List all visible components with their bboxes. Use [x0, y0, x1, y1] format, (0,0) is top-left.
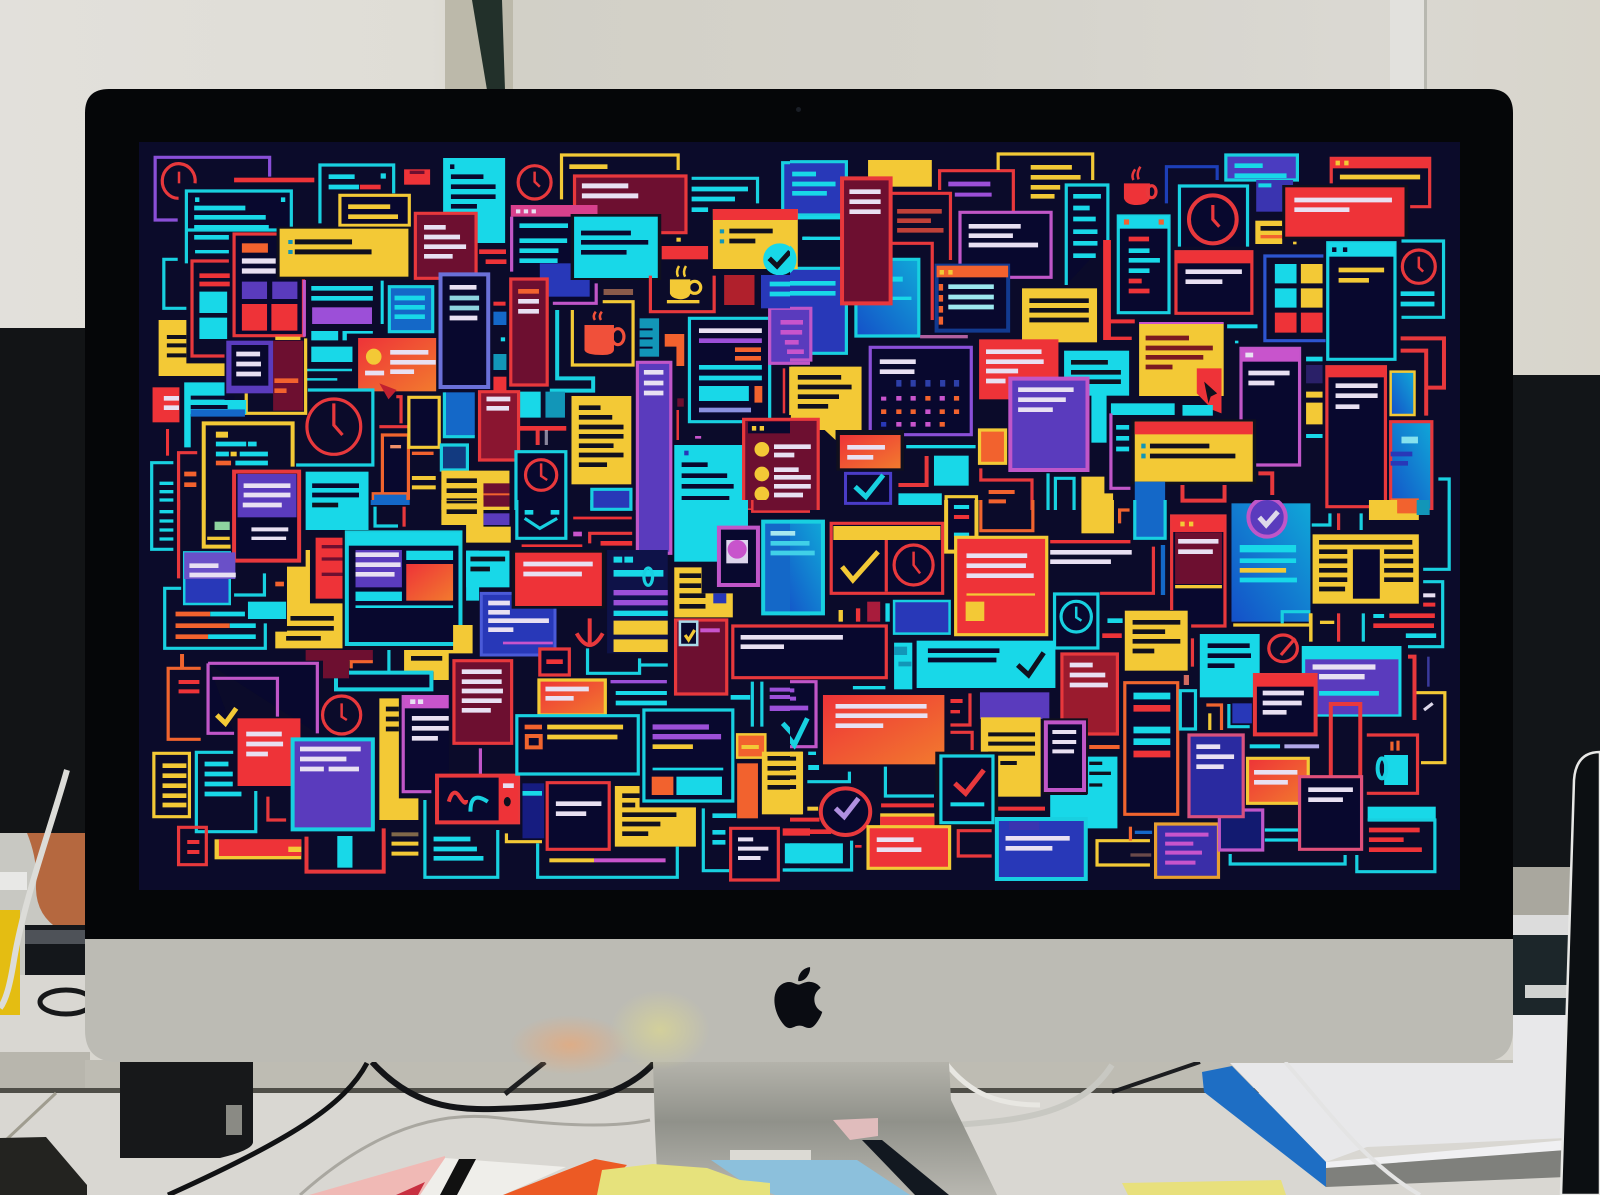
sticky notes on the desk: [309, 1118, 1286, 1195]
cyan tick: [1227, 324, 1258, 343]
pink title window: [511, 205, 598, 303]
cyan card: [571, 214, 661, 280]
cyan red list: [1357, 807, 1436, 872]
cyan text card: [1064, 351, 1129, 443]
cyan bracket: [164, 259, 186, 308]
yellow frame bottom: [204, 500, 231, 547]
red striped tile: [316, 538, 342, 599]
tiny ticks: [1102, 618, 1428, 720]
left desk items: [0, 770, 92, 1088]
check card red: [935, 752, 998, 830]
red small note: [731, 828, 778, 880]
yellow list frame: [154, 753, 189, 817]
blue mini card: [389, 287, 433, 332]
maroon panel with yellow frame: [246, 337, 306, 413]
yellow phone: [946, 497, 976, 540]
red report card: [956, 537, 1047, 635]
blue block: [444, 392, 475, 437]
background: office wall: [0, 0, 1600, 400]
dark device right edge: [1561, 752, 1600, 1195]
yellow note: [1022, 288, 1097, 342]
cyan frame with bars: [320, 165, 394, 223]
purple and yellow stack: [980, 692, 1049, 797]
cyan U: [588, 648, 668, 673]
red phone frame left: [168, 654, 201, 739]
purple list edge: [781, 682, 816, 747]
small stack: [392, 832, 418, 856]
cyan check list: [731, 682, 809, 735]
progress frame: [165, 588, 265, 648]
note with red cursor: [1139, 322, 1224, 416]
cyan and red cluster: [898, 445, 976, 486]
small red window: [1255, 675, 1316, 734]
black box on the desk: [120, 1062, 253, 1158]
teal frame: [1180, 691, 1195, 729]
magenta phone: [719, 528, 758, 585]
small blocks: [493, 302, 506, 370]
blue text window: [481, 593, 555, 655]
yellow note: [1125, 611, 1188, 671]
clock frame right: [1401, 241, 1444, 317]
red frame lower: [981, 468, 1032, 510]
mixed connector bits: [1206, 703, 1319, 748]
cyan list frame right: [1320, 582, 1443, 647]
screen background: [139, 142, 1460, 890]
magenta layered frame with check: [208, 663, 317, 733]
magenta text card: [960, 212, 1051, 277]
yellow and cyan rails: [1233, 612, 1313, 642]
yellow phone: [946, 493, 976, 552]
blue card lower: [786, 268, 846, 353]
purple column bottom: [637, 493, 671, 553]
blue card and dark red tile: [724, 237, 815, 308]
yellow speech note: [791, 367, 862, 440]
red frame list: [892, 193, 950, 320]
cyan pill and lines: [234, 573, 286, 619]
maroon tall card: [842, 178, 891, 303]
maroon left strip: [781, 419, 818, 516]
cyan list far left: [152, 463, 173, 530]
blue text window: [997, 819, 1086, 879]
yellow doc tile: [674, 567, 733, 617]
red bars: [479, 249, 506, 264]
cyan bent frame: [550, 310, 593, 391]
yellow slab: [1081, 477, 1113, 510]
small navy window: [441, 445, 467, 470]
red U with cyan tile: [307, 828, 384, 872]
cyan card lower: [306, 472, 369, 538]
red U: [1182, 473, 1272, 501]
blue square: [894, 601, 950, 634]
small red box: [540, 649, 569, 675]
large cyan frame: [186, 191, 291, 263]
small red struts: [853, 686, 972, 750]
red T struts: [519, 426, 566, 445]
red navy card: [547, 783, 609, 849]
yellow newspaper: [1313, 534, 1419, 604]
magenta mini doc: [1042, 718, 1088, 794]
clock status window: [516, 452, 566, 518]
red small frame: [179, 827, 206, 865]
navy red banner: [781, 626, 886, 678]
icon: red clock: [518, 166, 551, 199]
cyan bottom-left bar: [790, 841, 862, 870]
navy red card: [733, 626, 815, 678]
mixed side strip: [1306, 357, 1323, 438]
blue card: [763, 522, 817, 613]
cyan stack centre: [306, 281, 384, 379]
big red banner: [1282, 185, 1408, 239]
blue card edge: [592, 497, 631, 509]
book pages: [1326, 1140, 1566, 1187]
cyan window list: [1118, 216, 1169, 313]
tall red outline: [1331, 704, 1360, 777]
red note: [238, 718, 300, 786]
maroon list window: [744, 419, 813, 510]
red bracket: [958, 831, 992, 856]
cyan document right: [674, 445, 748, 542]
red tag: [662, 238, 708, 259]
yellow doc right: [784, 367, 815, 415]
icon: clock: [323, 696, 361, 734]
right dark panel: [1510, 375, 1600, 867]
upper right fragments: [1312, 497, 1449, 569]
cyan list edge: [152, 500, 179, 578]
pink strip: [920, 335, 968, 338]
cyan document card: [443, 158, 505, 243]
purple frame with clock: [155, 157, 270, 220]
magenta window: [403, 695, 449, 792]
purple text card: [1010, 379, 1088, 470]
blue card with check badge: [1231, 498, 1310, 622]
red lines: [522, 517, 632, 547]
cyan check banner: [917, 641, 1055, 688]
blue binder: [1202, 1066, 1326, 1187]
navy status column: [1125, 683, 1178, 814]
yellow step block: [441, 500, 511, 543]
red frame left: [192, 261, 230, 356]
orange bar: [1089, 745, 1120, 749]
yellow frame: [562, 155, 678, 199]
yellow L block: [404, 625, 473, 680]
calendar: [870, 347, 971, 435]
blue and red rails: [371, 500, 410, 527]
blue card edge: [781, 522, 823, 613]
yellow phone frame: [409, 397, 439, 489]
monitor chin: [85, 939, 1513, 1075]
small purple-framed note: [226, 341, 273, 393]
purple magenta card: [770, 308, 813, 363]
maroon card with red tab: [480, 377, 519, 460]
icon: apple logo: [774, 967, 822, 1028]
yellow stacked block: [441, 471, 509, 512]
red card: [512, 550, 605, 609]
clock window bottom: [517, 493, 566, 538]
red and yellow stripes: [790, 803, 1045, 834]
yellow window with check badge: [713, 209, 797, 275]
app grid panel: [1265, 256, 1326, 341]
cyan frame right: [692, 178, 758, 212]
cyan tall list: [1066, 185, 1108, 285]
icon: red down arrow: [577, 618, 603, 647]
maroon bottom edge: [752, 497, 813, 512]
yellow coded frame: [204, 423, 293, 510]
clock panel: [296, 390, 373, 465]
cyan side card: [466, 551, 509, 601]
screen collage: top-right quadrant: [790, 152, 1451, 510]
screen collage: bottom-left quadrant: [150, 500, 810, 882]
icon: red coffee mug: [572, 302, 633, 365]
orange tile: [1248, 758, 1308, 803]
cyan bits: [1265, 828, 1300, 842]
cables: [168, 1062, 1200, 1195]
desk surface: [0, 1060, 1600, 1195]
monitor stand: [653, 1062, 997, 1195]
yellow frame bottom: [1097, 827, 1152, 865]
yellow window edge: [770, 209, 798, 275]
dark blue column: [506, 783, 544, 842]
orange bracket: [665, 334, 684, 366]
small orange tile: [737, 734, 765, 758]
red struts and phone: [373, 397, 408, 502]
red message card: [358, 338, 436, 399]
red list frame: [179, 453, 197, 563]
blue bracket: [1166, 167, 1217, 203]
orange column: [737, 763, 758, 818]
right desk items behind monitor: [1510, 867, 1580, 1015]
cyan card bottom: [306, 497, 369, 530]
red stick: [166, 429, 169, 456]
main dashboard window: [343, 530, 464, 647]
cyan note: [1200, 634, 1260, 697]
blue card edge: [783, 163, 826, 216]
yellow doc: [615, 786, 696, 847]
red window: [1331, 158, 1430, 207]
cyan purple panel: [1302, 646, 1401, 717]
cyan notch card: [1050, 757, 1117, 828]
left blue window: [184, 552, 236, 604]
yellow red bar: [215, 839, 301, 859]
cyan tray: [1230, 854, 1345, 864]
yellow header block: [868, 160, 932, 187]
red list card: [979, 339, 1058, 399]
teal stripes: [894, 643, 912, 689]
purple doc edge: [786, 308, 811, 360]
yellow note left: [159, 320, 225, 376]
clock panel: [1179, 186, 1248, 247]
cyan list small: [703, 808, 736, 871]
maroon doc: [454, 661, 512, 775]
red window: [1176, 252, 1252, 313]
icon: yellow coffee cup: [650, 266, 714, 312]
orange note: [836, 430, 904, 471]
screen collage: top-left quadrant: [150, 153, 810, 510]
dark bars window: [517, 716, 638, 774]
yellow small tile: [1255, 221, 1297, 244]
paper stack: [1230, 1015, 1566, 1162]
maroon blocks: [306, 650, 373, 678]
purple red card bottom: [234, 493, 299, 561]
navy text panel: [1050, 540, 1165, 595]
cyan frame bottom: [425, 800, 498, 877]
maroon note: [415, 213, 476, 278]
white cable right: [1285, 1062, 1420, 1195]
cyan analytics window: [644, 710, 733, 801]
orange window: [937, 266, 1008, 331]
navy pink card: [1300, 777, 1362, 849]
dashboard tall panel: [234, 234, 304, 337]
icon: red coffee cup: [1124, 167, 1156, 205]
red TV widget: [437, 776, 518, 822]
blue small card: [592, 489, 631, 513]
brown bar: [604, 289, 633, 295]
teal stripes: [640, 318, 659, 357]
yellow frame right: [1414, 693, 1445, 763]
monitor icon outline: [336, 650, 431, 689]
yellow list frame: [998, 154, 1093, 199]
maroon tall card: [511, 279, 547, 385]
maroon card: [575, 176, 686, 233]
cyan rails: [807, 767, 934, 796]
icon: clock check badge: [821, 788, 870, 835]
purple card: [293, 739, 373, 829]
cyan top and side: [1111, 403, 1175, 488]
yellow tall panel: [379, 698, 418, 820]
cyan tray: [538, 843, 677, 877]
cyan doc bottom: [674, 497, 748, 562]
small bars: [611, 680, 667, 705]
screen collage: bottom-right quadrant: [790, 500, 1451, 881]
icon: red envelope: [404, 169, 430, 185]
maroon red window: [1172, 516, 1225, 626]
navy magenta tile: [1219, 810, 1263, 850]
cyan window: [1328, 243, 1395, 359]
cyan block lower-left: [184, 382, 246, 447]
tall red window: [1327, 367, 1385, 507]
red bar: [234, 178, 314, 182]
red L: [268, 797, 286, 820]
top fragments: [981, 497, 1165, 538]
red note yellow border: [868, 827, 950, 868]
monitor body: [85, 89, 1513, 940]
magenta window: [1241, 348, 1300, 465]
navy tall card: [441, 274, 488, 387]
icon: red gauge: [1269, 635, 1297, 662]
left dark panel: [0, 328, 90, 833]
yellow doc right: [762, 752, 803, 814]
cyan data frame: [689, 318, 770, 422]
right edge bits: [783, 828, 811, 872]
purple red card: [234, 472, 299, 558]
big yellow message: [277, 227, 412, 279]
maroon note: [1062, 654, 1117, 734]
yellow doc edge: [786, 752, 819, 814]
cyan rails: [1048, 473, 1074, 510]
dark object bottom left: [0, 1137, 87, 1195]
blue gradient strips: [1391, 372, 1449, 510]
orange framed card: [1156, 824, 1218, 877]
check card: [846, 473, 942, 505]
blue text card: [1189, 735, 1243, 817]
yellow window big: [1131, 419, 1256, 510]
check and clock widget: [831, 523, 943, 593]
yellow document: [571, 396, 631, 484]
red tab: [153, 387, 179, 422]
maroon check card: [676, 620, 727, 694]
large red banner: [823, 695, 944, 764]
red brackets: [1401, 338, 1444, 416]
blue gradient card: [856, 259, 919, 336]
red frame with violet bars: [940, 171, 1013, 212]
layered side panel: [607, 550, 668, 653]
orange tile: [980, 430, 1006, 463]
mini bar chart: [839, 602, 890, 622]
clock tile: [1055, 594, 1098, 648]
purple tall column: [637, 362, 671, 529]
red thick bracket: [1103, 240, 1135, 340]
red dashes: [677, 398, 701, 440]
blue card top: [786, 162, 846, 240]
top cyan-blue card: [1226, 155, 1297, 212]
cyan list frame: [196, 752, 256, 832]
yellow small frame: [340, 195, 409, 225]
mug window: [1367, 735, 1418, 793]
orange window: [539, 680, 605, 715]
yellow step shape: [275, 550, 342, 648]
cyan stripes: [519, 392, 565, 418]
